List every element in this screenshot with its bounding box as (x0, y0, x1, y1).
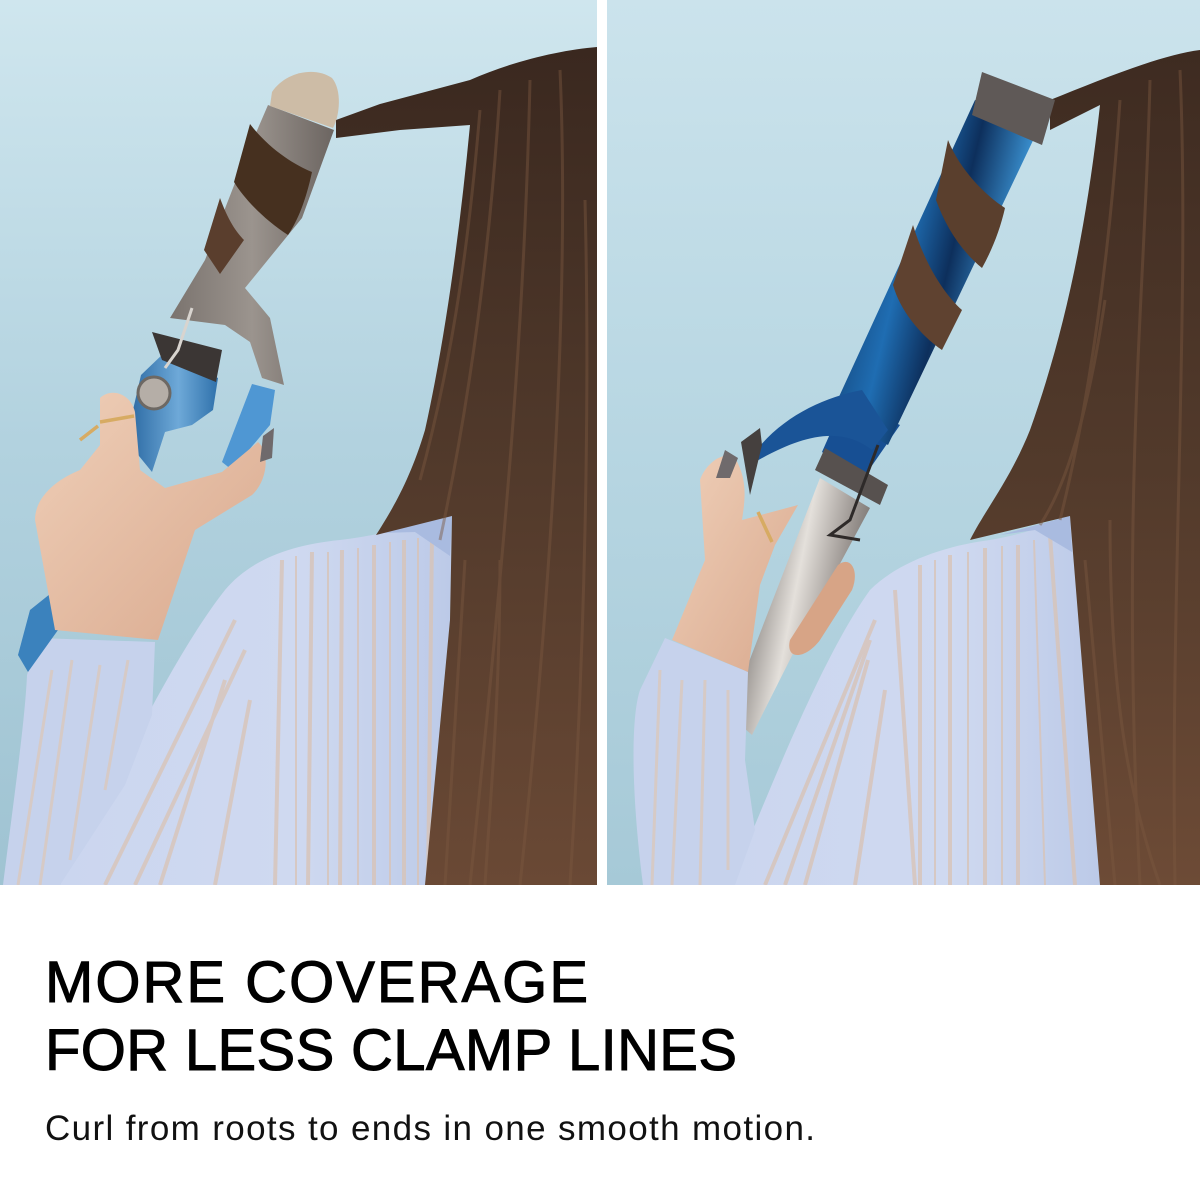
iron barrel (832, 100, 1038, 445)
left sweater back (60, 516, 452, 885)
right sweater collar (1000, 516, 1072, 552)
hair wrap upper (234, 124, 312, 235)
left sweater collar (380, 516, 452, 556)
title: MORE COVERAGE (45, 950, 588, 1015)
title: FOR LESS CLAMP LINES (45, 1018, 737, 1083)
right fingers on handle (789, 562, 855, 655)
iron lower barrel neck (822, 424, 900, 472)
right photo background (607, 0, 1200, 885)
iron clip wire (830, 445, 878, 540)
right hair (970, 50, 1200, 885)
hair wrap upper (936, 140, 1005, 268)
right nail (716, 450, 738, 478)
left hand (35, 393, 266, 640)
iron collar (152, 332, 222, 382)
right ring (758, 512, 772, 542)
left photo background (0, 0, 597, 885)
left curling iron (18, 72, 339, 672)
iron gray guard (170, 105, 334, 385)
iron handle base (18, 590, 58, 672)
left sweater ribs (105, 535, 432, 885)
iron lever (222, 384, 275, 470)
iron barrel tip (972, 72, 1055, 145)
left nail (260, 428, 274, 462)
hair wrap lower (893, 225, 962, 350)
panel: right photo, blue titanium barrel curling iron (607, 0, 1200, 885)
iron clamp end (741, 428, 762, 495)
iron clip wire (165, 308, 192, 368)
panel: left photo, silver cool-touch guard curling iron (0, 0, 597, 885)
right iron (741, 72, 1055, 735)
right sweater back (730, 516, 1100, 885)
left rings (80, 416, 134, 440)
iron handle (130, 352, 218, 472)
iron dial (138, 377, 170, 409)
right sweater ribs (765, 535, 1075, 885)
right hair strands (1040, 70, 1183, 885)
iron clamp arm (758, 390, 888, 460)
iron silver handle (744, 478, 870, 735)
right sleeve (634, 638, 755, 885)
subtitle: Curl from roots to ends in one smooth motion. (45, 1109, 815, 1148)
iron tip (270, 72, 339, 128)
right hand (672, 456, 798, 672)
left hair (336, 47, 597, 885)
left sleeve (3, 638, 155, 885)
hair wrap lower (204, 198, 244, 274)
iron collar (815, 448, 888, 505)
left hair strands (420, 70, 587, 885)
